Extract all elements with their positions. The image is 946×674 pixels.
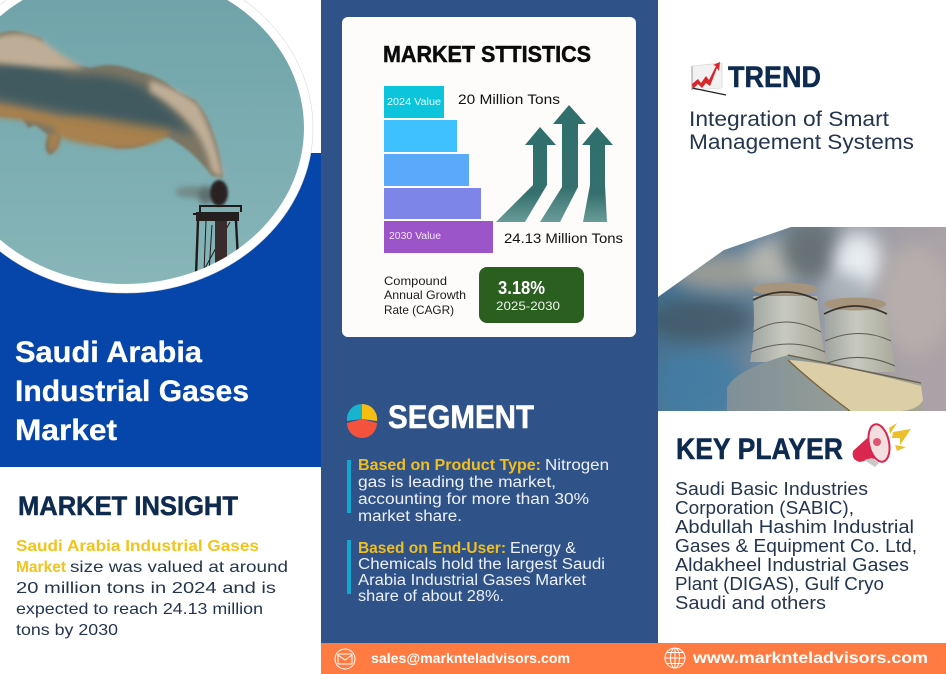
text block: product type segment: Nitrogen (545, 457, 609, 474)
text block: key players: Corporation (SABIC), (675, 498, 854, 518)
text block: trend (689, 108, 914, 154)
text block: product type segment (347, 457, 609, 525)
icon: segment pie (347, 404, 377, 438)
heading: segment: SEGMENT (388, 399, 534, 435)
label: CAGR: Annual Growth (384, 288, 466, 302)
text block: product type segment: Based on Product Type: (358, 457, 541, 474)
base building (727, 355, 923, 411)
panel: footer bar (321, 643, 946, 674)
smoke light highlights (0, 34, 223, 178)
contact: email address: sales@marknteladvisors.com (371, 651, 570, 666)
callout: CAGR value: 3.18% (498, 278, 545, 298)
label: 2030 value: 24.13 Million Tons (504, 230, 623, 246)
smoke orange underside (0, 102, 168, 153)
panel: left column background (0, 0, 321, 674)
text block: trend: Integration of Smart (689, 108, 889, 131)
text block: market insight: expected to reach 24.13 million (16, 601, 263, 618)
heading: market statistics: MARKET STTISTICS (383, 41, 591, 67)
panel: market statistics card (342, 17, 636, 337)
text block: end-user segment: share of about 28%. (358, 588, 504, 605)
text block: end-user segment: Chemicals hold the largest Saudi (358, 556, 605, 573)
panel: centre column background (321, 0, 658, 674)
callout: CAGR value (479, 267, 584, 323)
chimney right (824, 298, 896, 372)
text block: product type segment: accounting for more than 30% (358, 491, 589, 508)
label: CAGR: Compound (384, 274, 447, 288)
icon: trend chart (692, 62, 726, 95)
text block: key players: Gases & Equipment Co. Ltd, (675, 536, 917, 556)
flare tower (193, 206, 242, 275)
text block: key players: Plant (DIGAS), Gulf Cryo (675, 574, 884, 594)
text block: key players: Saudi Basic Industries (675, 479, 868, 499)
text block: market insight: Saudi Arabia Industrial Gases (16, 538, 259, 555)
text block: market insight (16, 538, 288, 639)
photo: smoking flare stack in oval frame (0, 0, 313, 293)
text block: key players: Saudi and others (675, 593, 826, 613)
text block: end-user segment: Arabia Industrial Gases Market (358, 572, 587, 589)
heading: trend: TREND (728, 61, 821, 94)
title: Saudi Arabia (15, 336, 202, 369)
text block: end-user segment: Based on End-User: (358, 540, 506, 557)
photo: industrial chimneys (658, 227, 946, 411)
text block: market insight: 20 million tons in 2024 and is (16, 580, 276, 597)
smoke silhouette (0, 31, 223, 178)
icon: email (335, 649, 355, 669)
smoke belly (54, 112, 170, 146)
label: CAGR (384, 274, 466, 317)
title (15, 336, 249, 447)
text block: key players: Aldakheel Industrial Gases (675, 555, 909, 575)
text block: market insight: size was valued at around (70, 559, 288, 576)
text block: key players (675, 479, 917, 613)
text block: key players: Abdullah Hashim Industrial (675, 517, 914, 537)
title: Industrial Gases (15, 375, 249, 408)
callout: CAGR value: 2025-2030 (496, 299, 560, 313)
contact: website: www.marknteladvisors.com (692, 650, 928, 667)
text block: market insight: Market (16, 559, 67, 576)
flare wisp (175, 186, 214, 204)
text block: product type segment: gas is leading the market, (358, 474, 556, 491)
icon: megaphone (853, 422, 911, 467)
label: CAGR: Rate (CAGR) (384, 303, 454, 317)
heading: market insight: MARKET INSIGHT (18, 491, 238, 521)
text block: market insight: tons by 2030 (16, 622, 118, 639)
smoke dark core (0, 64, 195, 135)
text block: product type segment: market share. (358, 508, 462, 525)
heading: key player: KEY PLAYER (676, 433, 843, 466)
chart: stepped value bars: 2030 Value (389, 231, 441, 242)
icon: globe (665, 648, 685, 668)
label: 2024 value: 20 Million Tons (458, 91, 560, 107)
text block: end-user segment (347, 540, 605, 605)
chimney left (750, 282, 826, 362)
text block: end-user segment: Energy & (510, 540, 577, 557)
chart: stepped value bars: 2024 Value (387, 97, 441, 108)
text block: trend: Management Systems (689, 131, 914, 154)
chart: stepped value bars (384, 86, 493, 253)
icon: rising arrows (496, 105, 613, 222)
flare puff (210, 180, 228, 206)
title: Market (15, 414, 117, 447)
